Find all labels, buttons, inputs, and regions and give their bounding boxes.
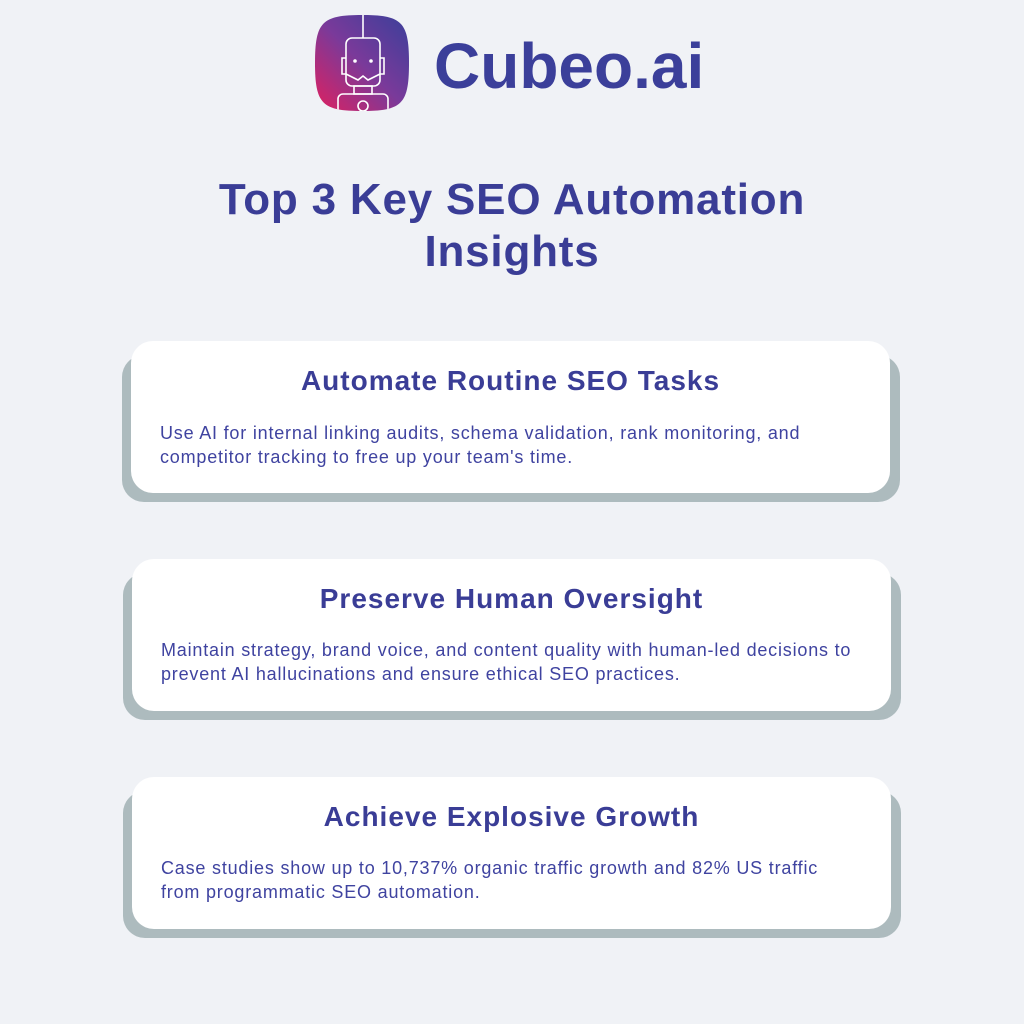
heading: card 1: Automate Routine SEO Tasks	[301, 365, 720, 396]
logo	[315, 15, 704, 111]
heading: card 3: Achieve Explosive Growth	[324, 801, 699, 832]
panel: card 1	[122, 341, 900, 502]
text: card 2: Maintain strategy, brand voice, and content quality with human-led decisions to prevent AI hallucinations and ensure ethical SEO practices.	[161, 640, 851, 684]
icon: robot	[315, 15, 409, 111]
text: card 3: Case studies show up to 10,737% organic traffic growth and 82% US traffic from programmatic SEO automation.	[161, 858, 818, 902]
text: card 1: Use AI for internal linking audits, schema validation, rank monitoring, and competitor tracking to free up your team's time.	[160, 423, 800, 467]
logo text: Cubeo.ai	[434, 30, 704, 102]
panel: card 2	[123, 559, 901, 720]
title: Top 3 Key SEO Automation	[219, 175, 805, 224]
panel: card 3	[123, 777, 901, 938]
title	[219, 175, 805, 276]
heading: card 2: Preserve Human Oversight	[320, 583, 703, 614]
title: Insights	[424, 227, 600, 276]
